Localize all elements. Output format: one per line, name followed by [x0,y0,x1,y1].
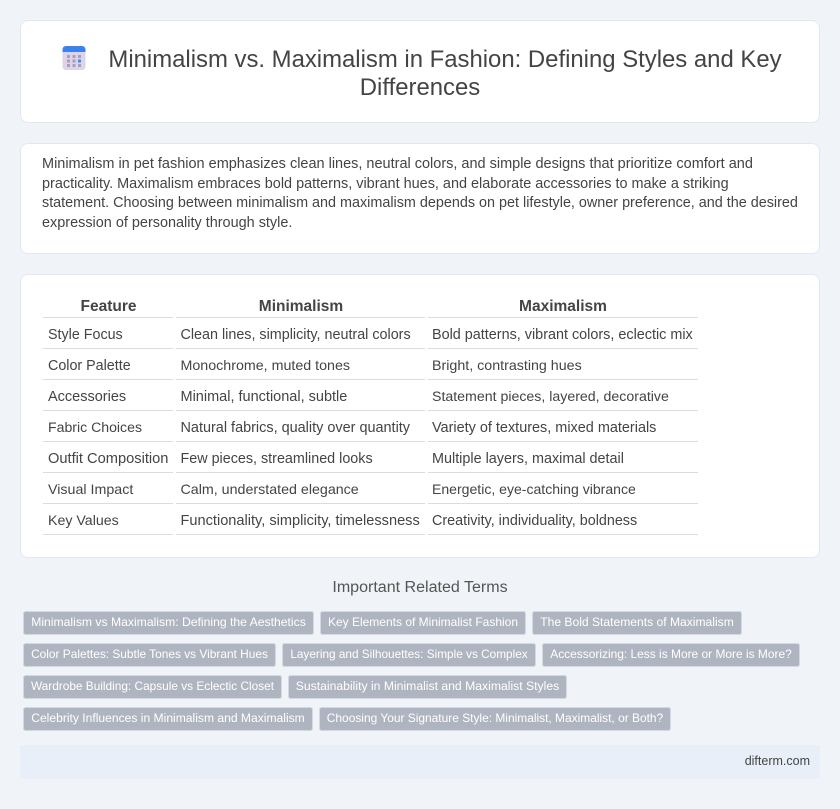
related terms tags: Celebrity Influences in Minimalism and Maximalism [31,711,305,725]
comparison table: Calm, understated elegance [180,482,359,498]
comparison table: Style Focus [48,327,123,343]
comparison table: Functionality, simplicity, timelessness [180,513,420,529]
comparison table: Color Palette [48,358,131,374]
comparison table: Fabric Choices [48,419,142,435]
comparison table: Bright, contrasting hues [432,358,582,374]
comparison table: Monochrome, muted tones [180,358,350,374]
related terms tags: Wardrobe Building: Capsule vs Eclectic Closet [31,679,274,693]
comparison table: Bold patterns, vibrant colors, eclectic mix [432,327,693,343]
table panel [20,274,820,558]
comparison table: Few pieces, streamlined looks [180,451,373,467]
footer bar [20,745,820,779]
comparison table: Minimal, functional, subtle [180,389,347,405]
comparison table: Visual Impact [48,482,133,498]
intro text [42,156,798,230]
related terms tags: Accessorizing: Less is More or More is More? [550,647,792,661]
related terms tags: Layering and Silhouettes: Simple vs Complex [290,647,528,661]
intro text: statement. Choosing between minimalism and maximalism depends on pet lifestyle, owner preference, and the desired [42,195,798,211]
related terms tags [23,611,800,731]
intro text: practicality. Maximalism embraces bold patterns, vibrant hues, and elaborate accessories to make a striking [42,176,729,192]
title: Minimalism vs. Maximalism in Fashion: Defining Styles and Key [108,46,782,73]
icon: calendar [62,46,86,70]
related terms heading: Important Related Terms [332,578,508,596]
comparison table: Creativity, individuality, boldness [432,513,637,529]
comparison table: Clean lines, simplicity, neutral colors [180,327,411,343]
comparison table: Feature [80,298,136,315]
comparison table: Key Values [48,513,119,529]
related terms tags: Color Palettes: Subtle Tones vs Vibrant Hues [31,647,268,661]
comparison table: Natural fabrics, quality over quantity [180,420,410,436]
comparison table: Statement pieces, layered, decorative [432,389,669,405]
related terms tags: Choosing Your Signature Style: Minimalist, Maximalist, or Both? [327,711,663,725]
intro text: expression of personality through style. [42,214,292,230]
related terms tags: Key Elements of Minimalist Fashion [328,615,518,629]
comparison table: Maximalism [519,298,607,315]
comparison table: Outfit Composition [48,451,168,467]
comparison table: Variety of textures, mixed materials [432,420,656,436]
intro text: Minimalism in pet fashion emphasizes clean lines, neutral colors, and simple designs that prioritize comfort and [42,156,753,172]
comparison table [43,298,698,535]
related terms tags: Minimalism vs Maximalism: Defining the Aesthetics [31,615,306,629]
title [108,46,782,101]
footer source link: difterm.com [745,754,810,768]
related terms tags: Sustainability in Minimalist and Maximalist Styles [296,679,559,693]
related terms tags: The Bold Statements of Maximalism [540,615,734,629]
comparison table: Energetic, eye-catching vibrance [432,481,636,497]
comparison table: Minimalism [259,298,343,315]
comparison table: Accessories [48,389,126,405]
intro panel [20,143,820,254]
comparison table: Multiple layers, maximal detail [432,451,624,467]
title: Differences [360,74,480,101]
header panel [20,20,820,123]
